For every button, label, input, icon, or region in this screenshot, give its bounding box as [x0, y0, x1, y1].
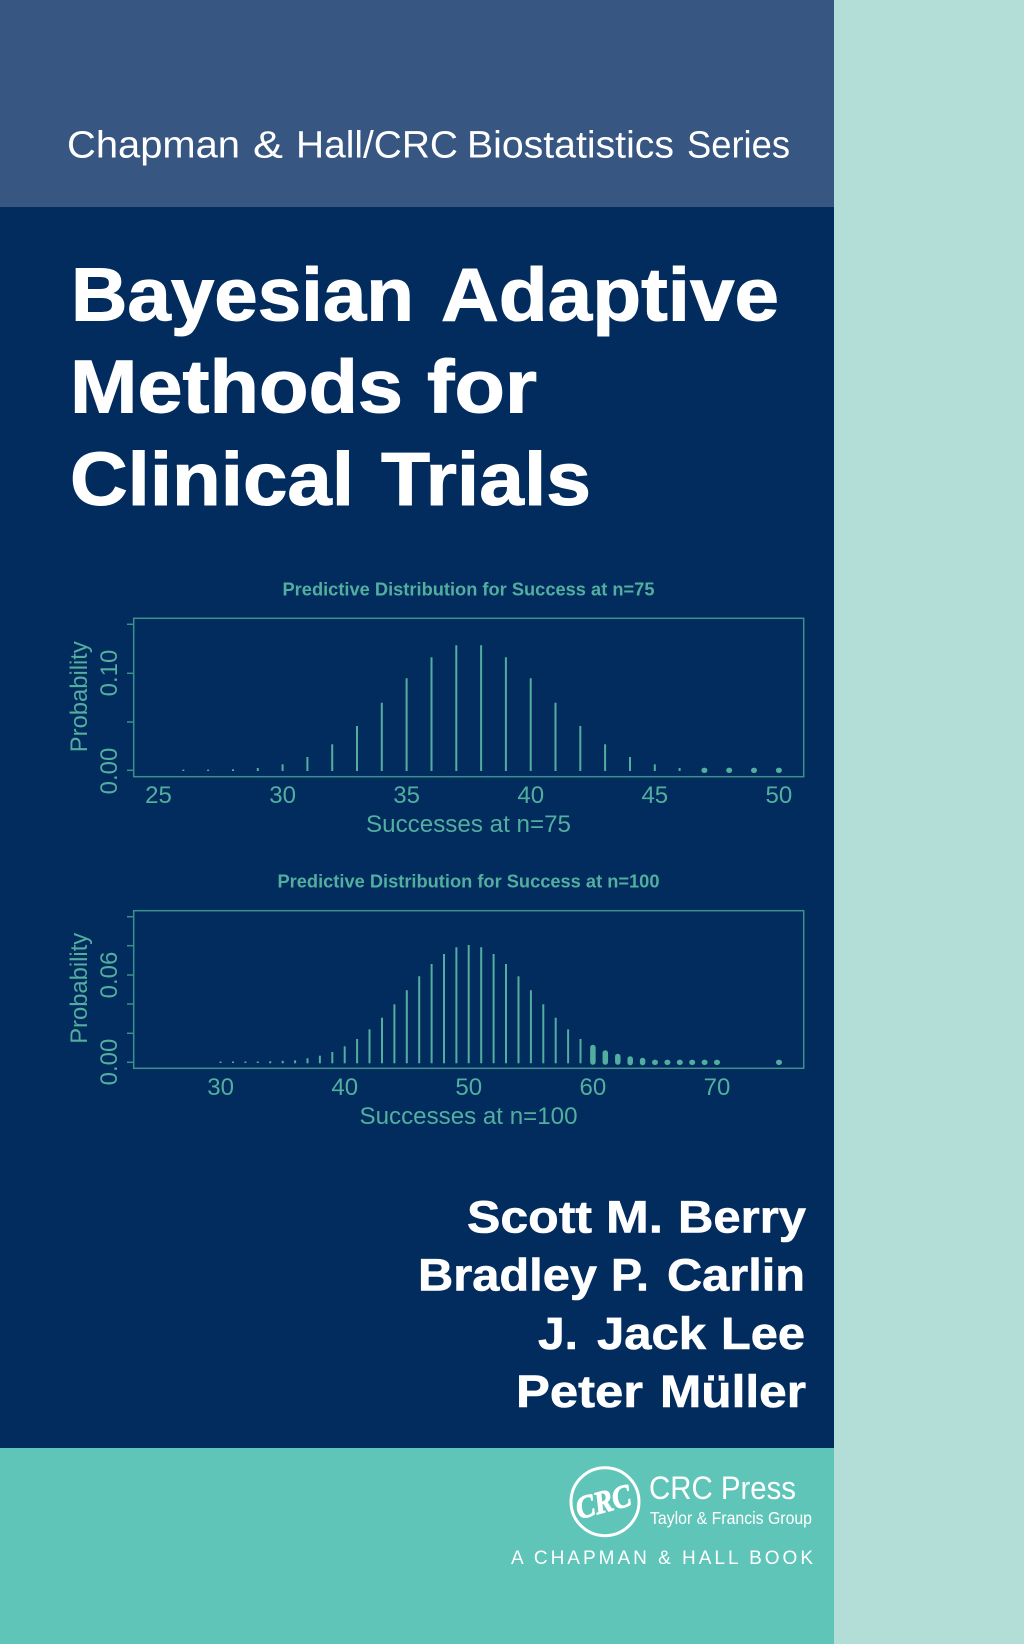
thick tail bars [593, 1048, 643, 1062]
series name: Hall/CRC [296, 124, 458, 166]
title: Clinical [70, 437, 354, 521]
chart: predictive distribution n=75 [66, 580, 804, 838]
authors: Carlin [667, 1250, 805, 1300]
title: Bayesian [71, 252, 414, 336]
authors: Lee [721, 1308, 805, 1359]
panel: main navy background [0, 207, 834, 1448]
plot frame [134, 618, 804, 777]
series name [67, 124, 790, 166]
authors: P. [611, 1250, 649, 1300]
authors: Berry [678, 1192, 806, 1242]
x axis tick labels: 40 [517, 782, 544, 809]
publisher name: CRC Press [649, 1470, 796, 1506]
x axis tick labels: 70 [704, 1074, 730, 1101]
x axis tick labels: 40 [331, 1074, 358, 1101]
authors: Jack [597, 1308, 707, 1359]
panel: publisher band [0, 1448, 834, 1644]
x axis tick labels: 30 [207, 1074, 234, 1101]
x axis tick labels: 60 [580, 1074, 606, 1101]
y axis tick labels: 0.00 [96, 1039, 123, 1085]
y axis tick labels: 0.06 [96, 952, 123, 998]
authors: J. [538, 1308, 578, 1359]
y axis ticks [127, 624, 134, 770]
x axis label: Successes at n=100 [360, 1103, 578, 1130]
x axis label: Successes at n=75 [366, 811, 571, 838]
authors: Scott [467, 1192, 592, 1242]
imprint line: A CHAPMAN & HALL BOOK [511, 1548, 813, 1569]
title: Methods [70, 344, 403, 428]
y axis label: Probability [66, 933, 93, 1044]
probability bars [221, 945, 580, 1063]
y axis ticks [127, 917, 134, 1062]
authors: Bradley [418, 1250, 597, 1300]
series name: Chapman [67, 124, 240, 166]
x axis tick labels: 50 [766, 782, 792, 809]
x axis tick labels: 30 [269, 782, 296, 809]
panel: right light stripe [834, 0, 1024, 1644]
title [70, 252, 779, 521]
series name: & [253, 124, 283, 166]
chart title: Predictive Distribution for Success at n=100 [278, 872, 660, 892]
title: for [427, 344, 537, 428]
x axis tick labels [145, 782, 792, 809]
plot frame [134, 911, 804, 1068]
y axis tick labels [96, 650, 123, 794]
x axis tick labels: 25 [145, 782, 172, 809]
title: Adaptive [441, 252, 779, 336]
icon: CRC logo: CRC [571, 1477, 635, 1526]
y axis tick labels: 0.10 [96, 650, 123, 696]
authors: Peter [516, 1366, 643, 1417]
chart: predictive distribution n=100 [66, 872, 804, 1130]
tail dots [701, 768, 782, 773]
x axis tick labels: 35 [393, 782, 420, 809]
y axis label: Probability [66, 641, 93, 752]
title: Trials [381, 437, 591, 521]
probability bars [183, 645, 680, 771]
y axis tick labels: 0.00 [96, 748, 123, 794]
authors [418, 1192, 806, 1417]
tail dots [652, 1060, 782, 1065]
panel: series banner [0, 0, 834, 207]
series name: Series [687, 124, 790, 166]
publisher group: Taylor & Francis Group [650, 1508, 812, 1528]
x axis tick labels: 45 [641, 782, 668, 809]
authors: M. [606, 1192, 663, 1242]
series name: Biostatistics [467, 124, 674, 166]
y axis tick labels [96, 952, 123, 1085]
authors: Müller [660, 1366, 806, 1417]
x axis tick labels: 50 [455, 1074, 482, 1101]
chart title: Predictive Distribution for Success at n=75 [282, 580, 654, 600]
x axis tick labels [207, 1074, 730, 1101]
